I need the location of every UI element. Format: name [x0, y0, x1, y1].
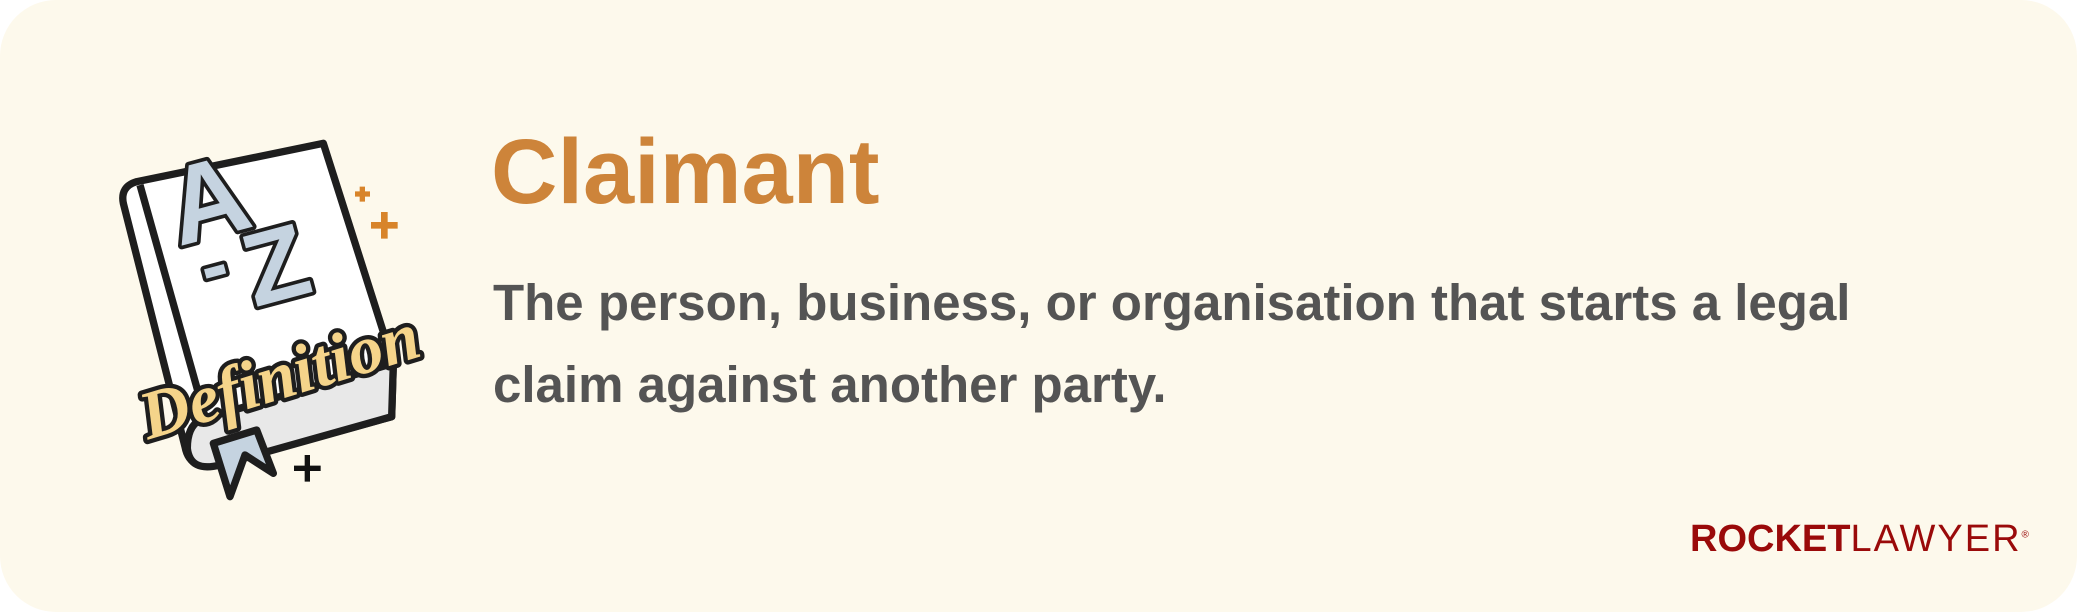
icon: definition book — [119, 130, 428, 500]
A-Z letters — [153, 130, 321, 329]
A-Z letters: Z — [230, 200, 321, 329]
A-Z letters: A — [153, 130, 262, 269]
Definition script label: Definition — [129, 297, 428, 454]
title: Claimant — [491, 121, 880, 223]
icon: bookmark — [213, 430, 273, 497]
A-Z letters: - — [189, 218, 238, 311]
logo: Rocket Lawyer: ROCKETLAWYER® — [1690, 518, 2029, 560]
definition text: The person, business, or organisation that starts a legal claim against another party. — [493, 274, 1850, 413]
book cover — [123, 143, 393, 467]
sparkles — [294, 187, 398, 482]
